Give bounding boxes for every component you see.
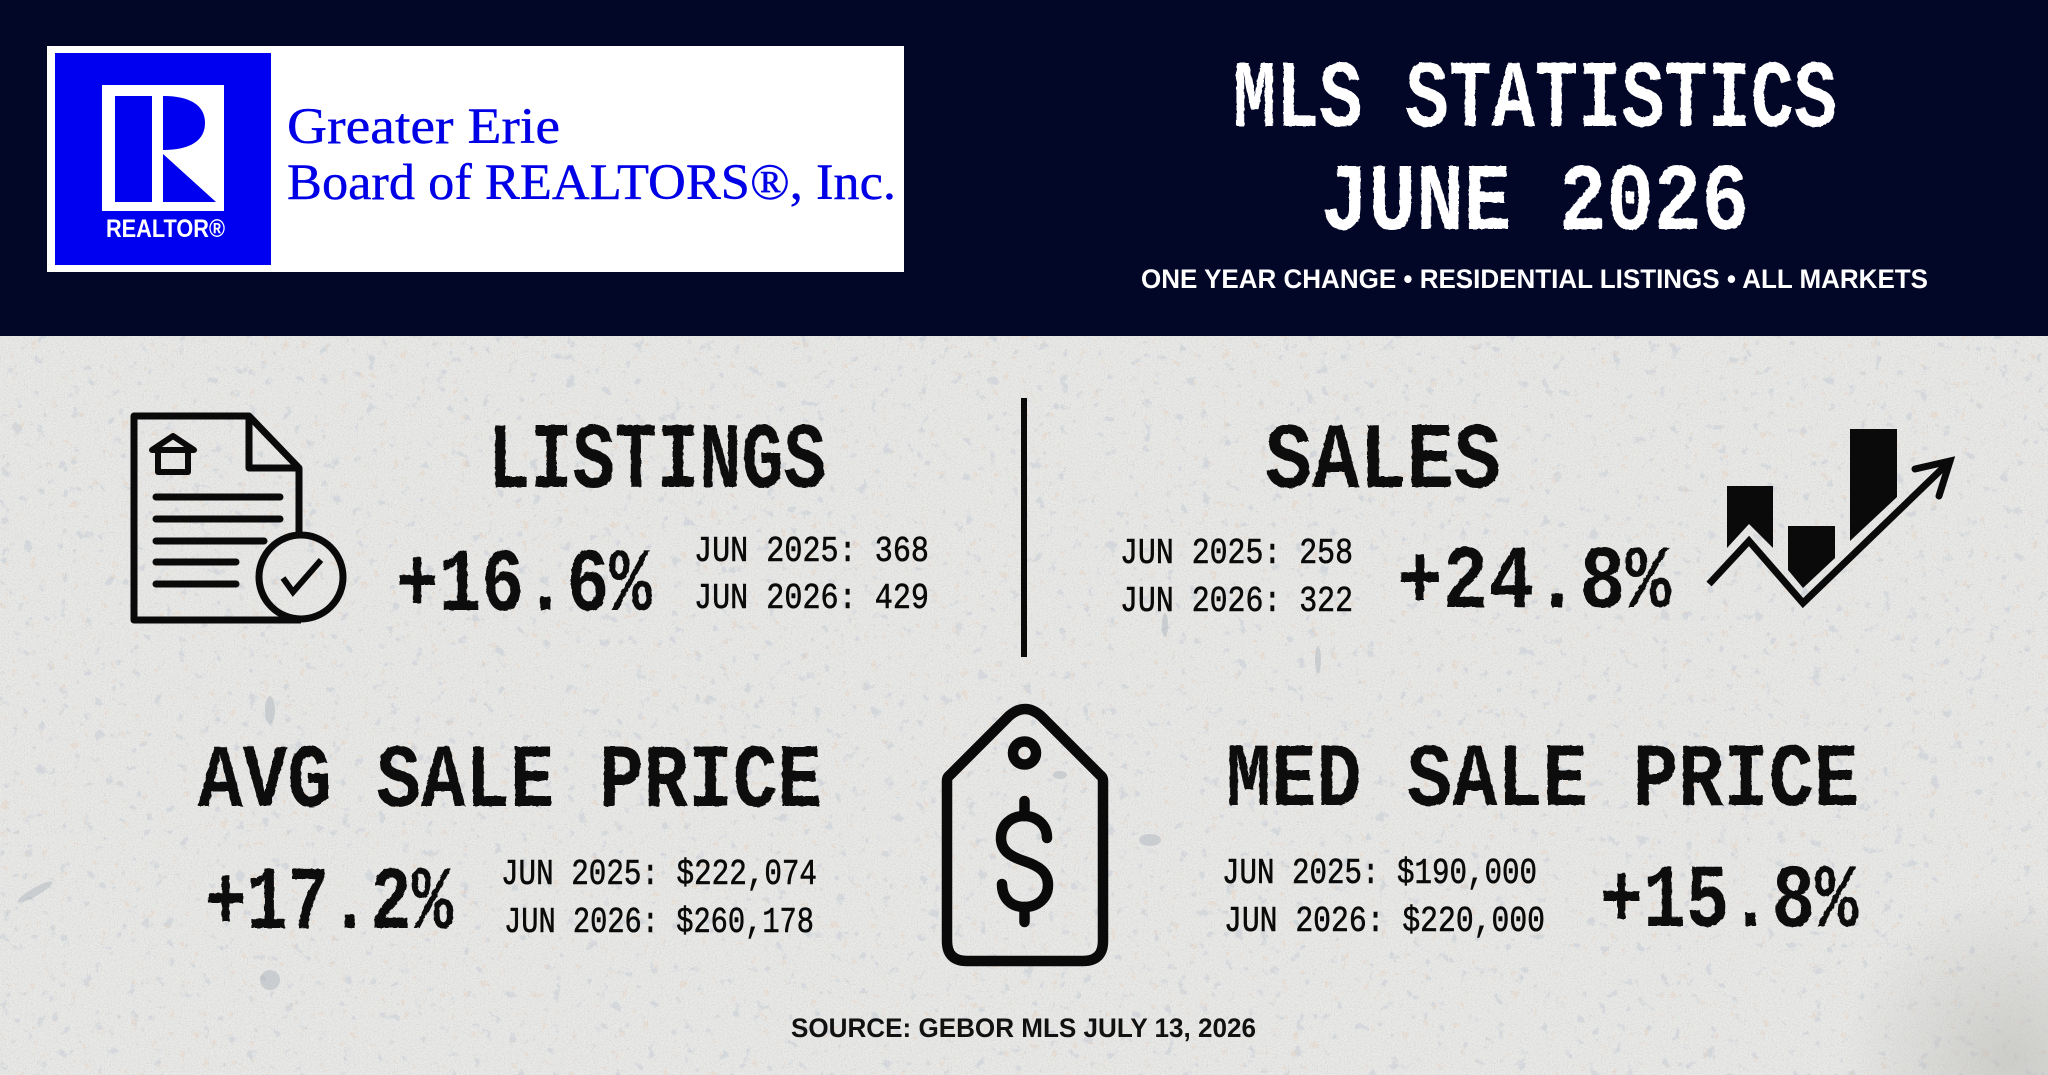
logo: REALTOR blue square: REALTOR®: [106, 215, 225, 243]
logo panel: [47, 46, 904, 272]
title: MLS STATISTICS: [1233, 46, 1837, 155]
sales values: JUN 2025: 258: [1120, 533, 1353, 574]
med price values: JUN 2026: $220,000: [1224, 901, 1545, 942]
logo: REALTOR blue square: [55, 53, 271, 265]
title: JUNE 2026: [1321, 149, 1749, 258]
avg price percent change: +17.2%: [205, 854, 454, 956]
sales percent change: +24.8%: [1397, 533, 1672, 635]
panel: sales: [1120, 410, 1672, 635]
panel: average sale price: [198, 732, 822, 956]
title: [1233, 46, 1837, 258]
heading: sales: SALES: [1265, 410, 1501, 516]
heading: avg sale price: AVG SALE PRICE: [198, 732, 822, 834]
avg price values: [501, 854, 817, 943]
header band: [0, 0, 2048, 336]
med price percent change: +15.8%: [1600, 852, 1859, 954]
panel: median sale price: [1222, 731, 1859, 954]
sales values: JUN 2026: 322: [1120, 581, 1353, 622]
avg price values: JUN 2026: $260,178: [504, 902, 814, 943]
heading: listings: LISTINGS: [488, 410, 826, 516]
subtitle: ONE YEAR CHANGE • RESIDENTIAL LISTINGS • ALL MARKETS: [1141, 264, 1928, 294]
logo: organisation name: [287, 99, 896, 211]
heading: med sale price: MED SALE PRICE: [1226, 731, 1859, 833]
center divider: [1021, 398, 1027, 657]
concrete background: [0, 336, 2048, 1075]
avg price values: JUN 2025: $222,074: [501, 854, 817, 895]
listings percent change: +16.6%: [396, 536, 653, 638]
source note: SOURCE: GEBOR MLS JULY 13, 2026: [791, 1013, 1256, 1043]
med price values: JUN 2025: $190,000: [1222, 853, 1537, 894]
med price values: [1222, 853, 1545, 942]
icon: rising bar chart with arrow: [1709, 429, 1950, 603]
panel: listings: [396, 410, 929, 638]
listings values: [694, 531, 929, 619]
listings values: JUN 2025: 368: [694, 531, 929, 572]
logo: organisation name: Board of REALTORS®, Inc.: [287, 155, 896, 211]
icon: listing document with check: [134, 416, 343, 620]
listings values: JUN 2026: 429: [694, 578, 929, 619]
sales values: [1120, 533, 1353, 622]
icon: price tag with dollar sign: [947, 709, 1103, 961]
logo: organisation name: Greater Erie: [287, 99, 560, 155]
